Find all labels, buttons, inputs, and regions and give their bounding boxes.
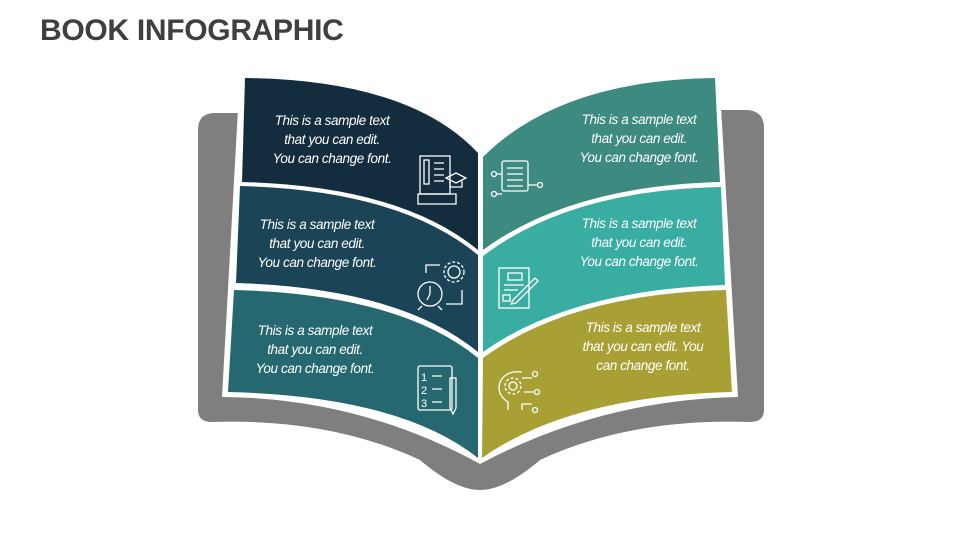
book cover back [198, 110, 764, 490]
text block: right 3: This is a sample text [586, 320, 700, 335]
text block: left 2: This is a sample text [260, 217, 374, 232]
text block: right 3 [583, 320, 704, 373]
text block: right 2: that you can edit. [591, 235, 687, 250]
icon: form with pencil [499, 268, 538, 308]
icon: numbered list with pen: 2 [421, 385, 427, 397]
text block: right 1: This is a sample text [582, 112, 696, 127]
panel: left 3 [228, 290, 478, 458]
title: BOOK INFOGRAPHIC [40, 14, 344, 47]
text block: left 1: This is a sample text [275, 113, 389, 128]
text block: right 3: that you can edit. You [583, 339, 703, 354]
text block: right 1: that you can edit. [591, 131, 687, 146]
panel: right 1 [483, 78, 720, 250]
text block: right 2 [580, 216, 698, 269]
panel: right 3 [482, 290, 732, 458]
panel: left 1 [242, 78, 478, 250]
icon: head with gear [499, 372, 540, 412]
text block: left 2: You can change font. [258, 255, 376, 270]
icon: document network [492, 161, 542, 196]
icon: document with graduation cap [418, 156, 466, 204]
text block: right 2: You can change font. [580, 254, 698, 269]
text block: left 3: This is a sample text [258, 323, 372, 338]
panel: right 2 [483, 187, 725, 352]
text block: left 1: You can change font. [273, 151, 391, 166]
text block: right 1 [580, 112, 698, 165]
icon: numbered list with pen: 1 [421, 372, 427, 384]
text block: left 3 [256, 323, 374, 376]
text block: left 1: that you can edit. [284, 132, 380, 147]
text block: left 3: that you can edit. [267, 342, 363, 357]
text block: right 2: This is a sample text [582, 216, 696, 231]
text block: right 3: can change font. [596, 358, 690, 373]
icon: numbered list with pen: 3 [421, 398, 427, 410]
text block: left 2: that you can edit. [269, 236, 365, 251]
page white border [222, 73, 738, 464]
text block: left 1 [273, 113, 391, 166]
icon: numbered list with pen [418, 366, 456, 414]
panel: left 2 [236, 186, 478, 352]
text block: right 1: You can change font. [580, 150, 698, 165]
icon: clock with gear [418, 262, 464, 310]
text block: left 3: You can change font. [256, 361, 374, 376]
text block: left 2 [258, 217, 376, 270]
